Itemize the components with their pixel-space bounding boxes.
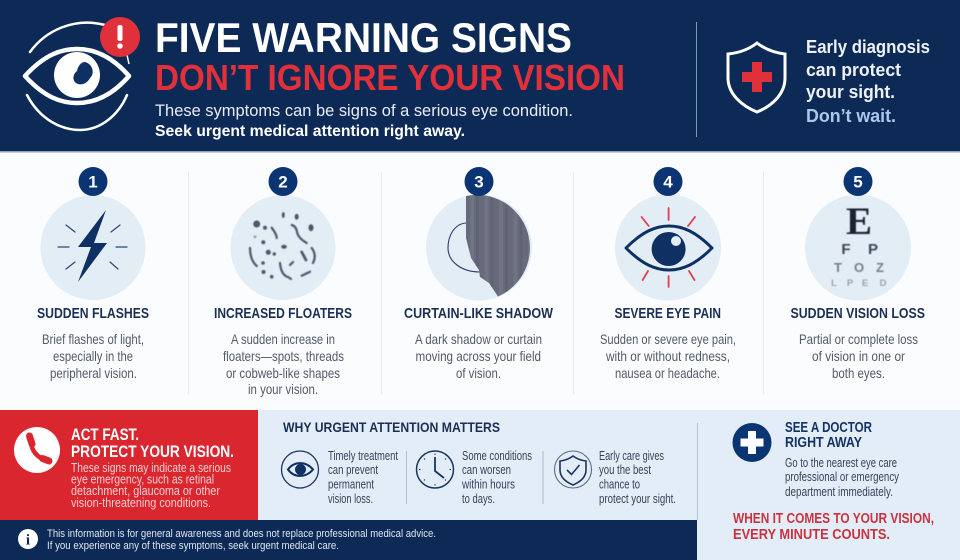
panel: act fast xyxy=(0,410,258,520)
number badge 5: 5 xyxy=(853,172,863,192)
heading: WHY URGENT ATTENTION MATTERS xyxy=(283,419,500,435)
illustration: eye with pain rays xyxy=(615,194,721,300)
description xyxy=(600,331,736,381)
heading: SEVERE EYE PAIN xyxy=(614,305,721,322)
panel: footer disclaimer xyxy=(0,520,697,560)
panel: sign 5 sudden vision loss xyxy=(790,167,925,381)
heading: RIGHT AWAY xyxy=(785,435,862,451)
description: A sudden increase in xyxy=(231,331,335,347)
number badge 5 xyxy=(844,167,872,196)
description: These signs may indicate a serious xyxy=(71,461,231,475)
description xyxy=(223,331,344,397)
panel: why urgent attention matters xyxy=(258,410,697,520)
early diagnosis message xyxy=(806,37,930,126)
heading: SEE A DOCTOR xyxy=(785,420,872,436)
early diagnosis message: can protect xyxy=(806,60,901,80)
title: FIVE WARNING SIGNS xyxy=(155,14,572,61)
reason 1: permanent xyxy=(328,476,374,492)
description xyxy=(799,331,918,381)
illustration: eye chart xyxy=(805,194,911,300)
early diagnosis message: your sight. xyxy=(806,82,895,102)
description: or cobweb-like shapes xyxy=(226,365,340,381)
illustration: eye chart: D xyxy=(880,278,887,289)
description xyxy=(785,455,899,499)
reason 2: within hours xyxy=(461,476,515,492)
description: professional or emergency xyxy=(785,469,899,484)
description: department immediately. xyxy=(785,484,893,499)
reason 1: vision loss. xyxy=(328,491,373,506)
heading: SUDDEN FLASHES xyxy=(37,305,149,322)
icon: info xyxy=(18,529,38,549)
panel: see a doctor xyxy=(697,410,960,560)
reason 1: Timely treatment xyxy=(328,448,398,463)
description: moving across your field xyxy=(416,348,541,364)
description: nausea or headache. xyxy=(615,365,720,381)
illustration: eye chart: O xyxy=(854,260,864,275)
description: Go to the nearest eye care xyxy=(785,455,897,470)
icon: phone xyxy=(14,427,60,473)
number badge 2: 2 xyxy=(278,172,288,192)
callout: EVERY MINUTE COUNTS. xyxy=(733,527,890,543)
illustration: eye chart: P xyxy=(847,278,854,289)
reason 3 xyxy=(599,448,676,506)
description: detachment, glaucoma or other xyxy=(71,484,220,498)
icon: info: i xyxy=(26,532,30,548)
description: Brief flashes of light, xyxy=(42,331,144,347)
urgent line: Seek urgent medical attention right away. xyxy=(155,123,465,140)
reason 3: you the best xyxy=(599,462,651,477)
icon: medical plus xyxy=(732,423,772,462)
panel: sign 2 increased floaters xyxy=(214,167,352,397)
description: with or without redness, xyxy=(605,348,730,364)
panel: sign 1 sudden flashes xyxy=(37,167,149,381)
heading: INCREASED FLOATERS xyxy=(214,305,352,322)
callout xyxy=(733,511,934,543)
reason 2 xyxy=(461,448,532,506)
illustration: eye chart: E xyxy=(862,278,868,289)
illustration: curtain shadow xyxy=(426,194,532,300)
description: in your vision. xyxy=(248,381,318,397)
illustration: eye chart: F xyxy=(841,241,851,258)
disclaimer text: If you experience any of these symptoms, seek urgent medical care. xyxy=(47,540,339,552)
panel: sign 3 curtain-like shadow xyxy=(404,167,554,381)
illustration: eye chart: L xyxy=(831,278,837,289)
heading: ACT FAST. xyxy=(71,426,139,444)
description: Sudden or severe eye pain, xyxy=(600,331,736,347)
description xyxy=(42,331,144,381)
heading xyxy=(71,426,234,461)
number badge 4 xyxy=(654,167,682,196)
number badge 4: 4 xyxy=(663,172,673,192)
disclaimer text: This information is for general awareness and does not replace professional medical advice. xyxy=(47,528,436,540)
reason 2: can worsen xyxy=(462,462,511,477)
panel: sign 4 severe eye pain xyxy=(600,167,736,381)
early diagnosis message: Early diagnosis xyxy=(806,37,930,57)
icon: shield check xyxy=(554,451,592,488)
illustration: eye chart: Z xyxy=(876,260,884,275)
description: of vision. xyxy=(456,365,501,381)
icon: eye xyxy=(282,451,318,488)
description: especially in the xyxy=(53,348,133,364)
heading xyxy=(785,420,872,451)
description: eye emergency, such as retinal xyxy=(71,472,214,486)
icon: shield with cross xyxy=(728,43,785,112)
description: Partial or complete loss xyxy=(799,331,918,347)
description: of vision in one or xyxy=(812,348,905,364)
number badge 3 xyxy=(464,167,494,196)
icon: eye with warning badge xyxy=(25,17,140,130)
reason 3: chance to xyxy=(599,476,640,492)
description: These symptoms can be signs of a serious eye condition. xyxy=(155,101,573,120)
reason 2: Some conditions xyxy=(462,448,532,463)
reason 2: to days. xyxy=(462,491,495,506)
heading: SUDDEN VISION LOSS xyxy=(790,305,925,322)
number badge 1 xyxy=(78,167,108,196)
subtitle in red: DON’T IGNORE YOUR VISION xyxy=(155,57,625,98)
heading: PROTECT YOUR VISION. xyxy=(71,443,234,461)
disclaimer text xyxy=(47,528,436,552)
description: peripheral vision. xyxy=(50,365,137,381)
illustration: lightning bolt xyxy=(40,195,146,300)
reason 3: protect your sight. xyxy=(599,491,676,506)
description: both eyes. xyxy=(832,365,885,381)
number badge 1: 1 xyxy=(88,172,98,192)
reason 1 xyxy=(328,448,398,506)
description: vision-threatening conditions. xyxy=(71,496,211,510)
early diagnosis message: Don’t wait. xyxy=(806,106,896,126)
reason 1: can prevent xyxy=(328,462,378,477)
panel: header banner xyxy=(0,0,960,152)
description xyxy=(415,331,542,381)
number badge 3: 3 xyxy=(474,172,484,192)
description: A dark shadow or curtain xyxy=(415,331,542,347)
reason 3: Early care gives xyxy=(599,448,664,463)
description: floaters—spots, threads xyxy=(223,348,344,364)
illustration: eye chart: T xyxy=(834,260,842,275)
illustration: floaters xyxy=(230,195,336,300)
illustration: eye chart: E xyxy=(846,200,872,243)
number badge 2 xyxy=(268,167,298,196)
icon: clock xyxy=(416,451,454,488)
heading: CURTAIN-LIKE SHADOW xyxy=(404,305,554,322)
illustration: eye chart: P xyxy=(868,241,878,258)
description xyxy=(71,461,231,510)
